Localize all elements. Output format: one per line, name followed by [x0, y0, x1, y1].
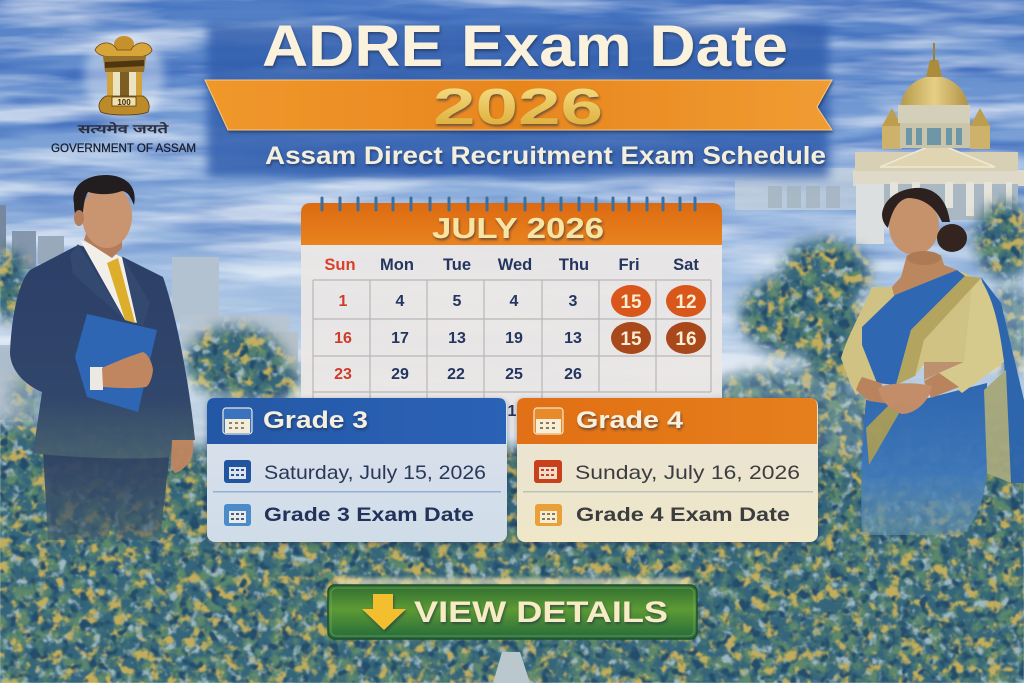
button label: VIEW DETAILS [414, 596, 668, 629]
icon: label [224, 504, 251, 526]
icon: date [534, 460, 562, 483]
date numbers: 4 [396, 293, 405, 310]
divider [523, 491, 813, 492]
subtitle: Assam Direct Recruitment Exam Schedule [265, 142, 826, 170]
highlighted dates: 15 [620, 329, 642, 350]
calendar body [301, 240, 722, 430]
card body [207, 398, 507, 542]
sash border [896, 276, 981, 385]
date numbers: 25 [505, 366, 523, 383]
date numbers: 3 [569, 293, 578, 310]
date numbers: 13 [448, 330, 466, 347]
clasped hands [878, 383, 932, 414]
exam label: Grade 4 Exam Date [576, 504, 790, 526]
highlighted dates: 15 [620, 292, 642, 313]
forest mist over figures [0, 466, 1024, 550]
right sleeve [939, 280, 1004, 393]
divider [213, 491, 501, 492]
date numbers: 26 [564, 366, 582, 383]
lapels [70, 244, 125, 320]
neck [84, 228, 122, 258]
date numbers: 16 [334, 330, 352, 347]
grade heading: Grade 3 [263, 407, 368, 434]
emblem: state emblem [84, 32, 164, 120]
panel: grade 4 [517, 398, 818, 542]
highlighted dates: 12 [675, 292, 697, 313]
shirt collar [80, 240, 137, 323]
organisation name: GOVERNMENT OF ASSAM [51, 141, 196, 155]
hair bun [937, 224, 967, 252]
date numbers [334, 293, 582, 420]
shoulder drape [981, 277, 1024, 483]
weekday labels: Wed [498, 256, 532, 274]
date numbers: 1 [339, 293, 348, 310]
exam date: Sunday, July 16, 2026 [575, 462, 800, 484]
lower border [866, 403, 905, 465]
date numbers: 4 [510, 293, 519, 310]
sash [862, 270, 965, 385]
emblem: state emblem: 100 [117, 98, 131, 107]
highlighted dates [611, 285, 706, 354]
hair [882, 188, 950, 228]
icon: calendar [223, 408, 252, 434]
title: ADRE Exam Date [262, 14, 788, 79]
trousers [43, 450, 170, 540]
inner drape [984, 370, 1011, 483]
weekday labels: Mon [380, 256, 414, 274]
blouse [841, 270, 981, 395]
background: forest [0, 192, 1024, 683]
emblem motto: सत्यमेव जयते [76, 122, 170, 136]
weekday labels: Sat [673, 256, 699, 274]
highlighted dates: 16 [675, 329, 697, 350]
date numbers: 22 [447, 366, 465, 383]
card body [517, 398, 818, 542]
icon: calendar [534, 408, 563, 434]
shirt cuff [90, 367, 103, 390]
right hand [171, 440, 193, 473]
weekday labels: Fri [618, 256, 640, 274]
right forearm [924, 373, 959, 398]
skirt [861, 383, 987, 535]
neck shade [907, 251, 941, 265]
date numbers: 1 [508, 403, 517, 420]
road [493, 652, 530, 683]
date numbers: 17 [391, 330, 409, 347]
date numbers: 13 [564, 330, 582, 347]
background: distant city skyline [0, 205, 298, 420]
midriff [924, 362, 964, 380]
date numbers: 19 [505, 330, 523, 347]
face [889, 197, 939, 255]
spiral binding [322, 198, 695, 210]
illustration: man in suit [10, 175, 195, 540]
neck and chest [892, 255, 957, 296]
card header [517, 398, 817, 444]
ear [74, 210, 84, 226]
tie [107, 258, 135, 323]
panel: calendar [301, 198, 722, 430]
grade heading: Grade 4 [576, 407, 684, 434]
face [82, 184, 132, 248]
exam date: Saturday, July 15, 2026 [264, 462, 486, 484]
exam label: Grade 3 Exam Date [264, 504, 474, 526]
ribbon with year: 2026 [433, 78, 603, 135]
hair [73, 175, 135, 225]
calendar header [301, 203, 722, 245]
folder [75, 314, 157, 412]
weekday labels: Thu [559, 256, 589, 274]
left forearm [856, 377, 890, 404]
icon: down arrow [362, 594, 406, 630]
hand on folder [102, 352, 153, 388]
month heading: JULY 2026 [432, 213, 604, 245]
weekday labels [324, 256, 699, 274]
weekday labels: Sun [324, 256, 356, 274]
date numbers: 23 [334, 366, 352, 383]
icon: label [535, 504, 562, 526]
date numbers: 5 [453, 293, 462, 310]
icon: date [224, 460, 251, 483]
background: capitol building [735, 43, 1024, 244]
title backing band [207, 24, 829, 177]
panel: grade 3 [207, 398, 507, 542]
date grid [313, 280, 711, 430]
button: view details [328, 578, 697, 639]
weekday labels: Tue [443, 256, 471, 274]
ribbon with year [205, 78, 832, 135]
illustration: woman in saree [841, 188, 1024, 535]
jacket [10, 245, 195, 458]
card header [207, 398, 506, 444]
date numbers: 29 [391, 366, 409, 383]
